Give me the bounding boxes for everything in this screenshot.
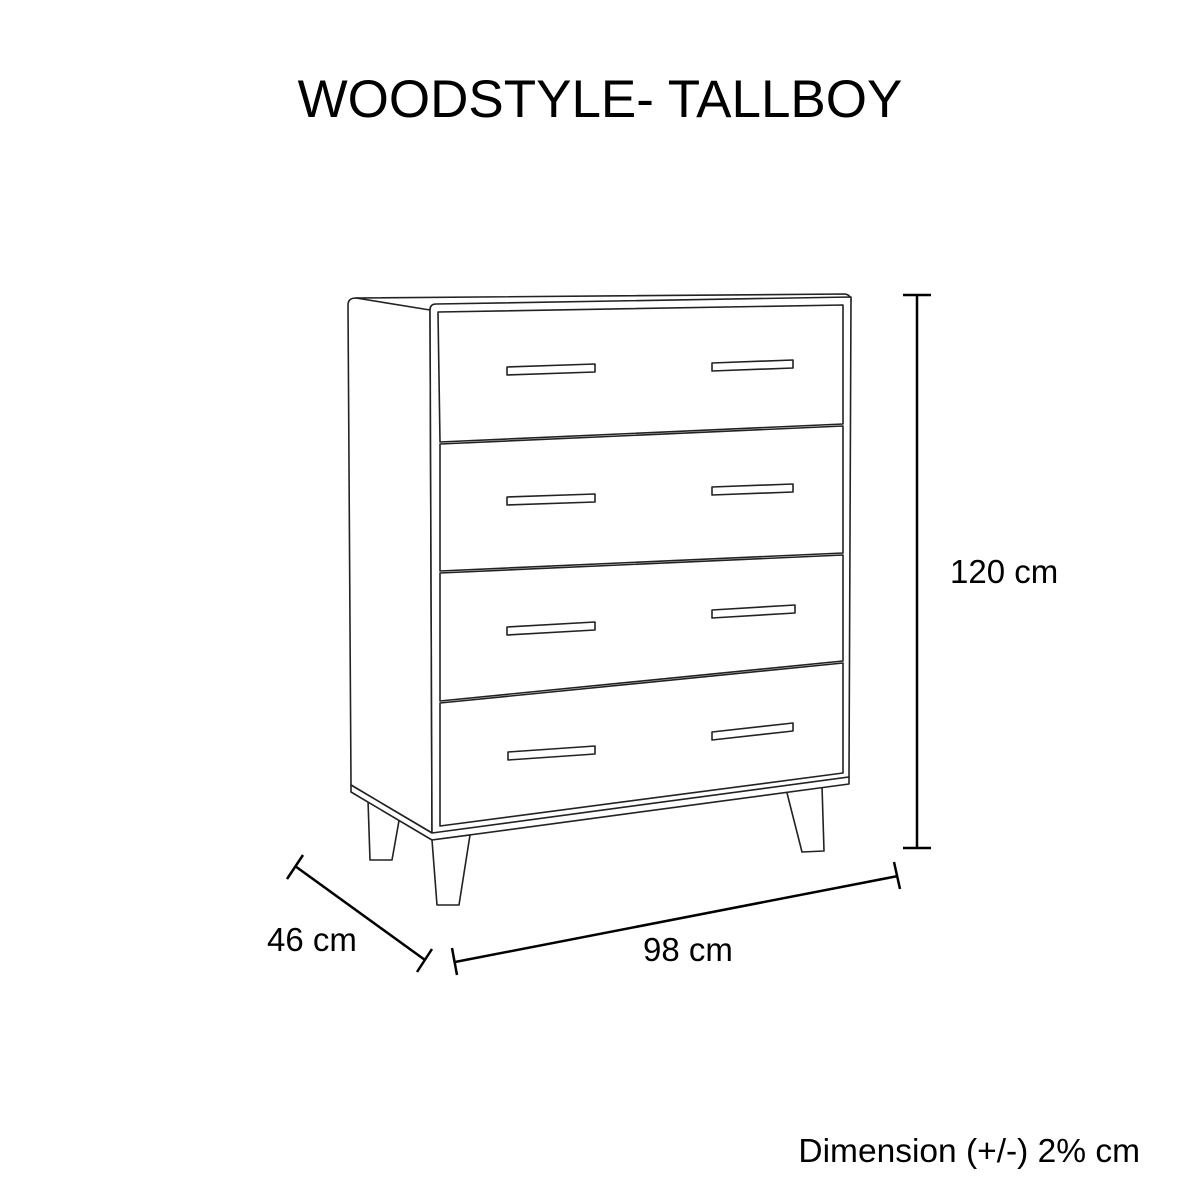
plinth xyxy=(351,777,849,840)
drawer 1 xyxy=(438,305,843,442)
title: WOODSTYLE- TALLBOY xyxy=(298,70,902,129)
label: 46 cm: 46 cm xyxy=(267,921,357,958)
back-right leg xyxy=(786,786,824,852)
label: 98 cm: 98 cm xyxy=(643,931,733,968)
dimension: width 98 cm xyxy=(452,862,900,975)
dimension: height 120 cm xyxy=(903,295,931,848)
front-left leg xyxy=(432,835,470,905)
drawer 2 xyxy=(440,426,843,571)
side panel xyxy=(348,298,432,833)
top xyxy=(356,294,851,310)
dimension: depth 46 cm xyxy=(287,855,432,972)
footnote: Dimension (+/-) 2% cm xyxy=(798,1133,1140,1170)
drawer 3 xyxy=(440,555,843,701)
handles xyxy=(507,364,595,375)
front panel xyxy=(430,297,851,834)
tallboy drawing xyxy=(348,294,851,905)
back-left leg xyxy=(368,800,400,860)
drawer 4 xyxy=(440,663,843,826)
label: 120 cm: 120 cm xyxy=(950,553,1058,590)
